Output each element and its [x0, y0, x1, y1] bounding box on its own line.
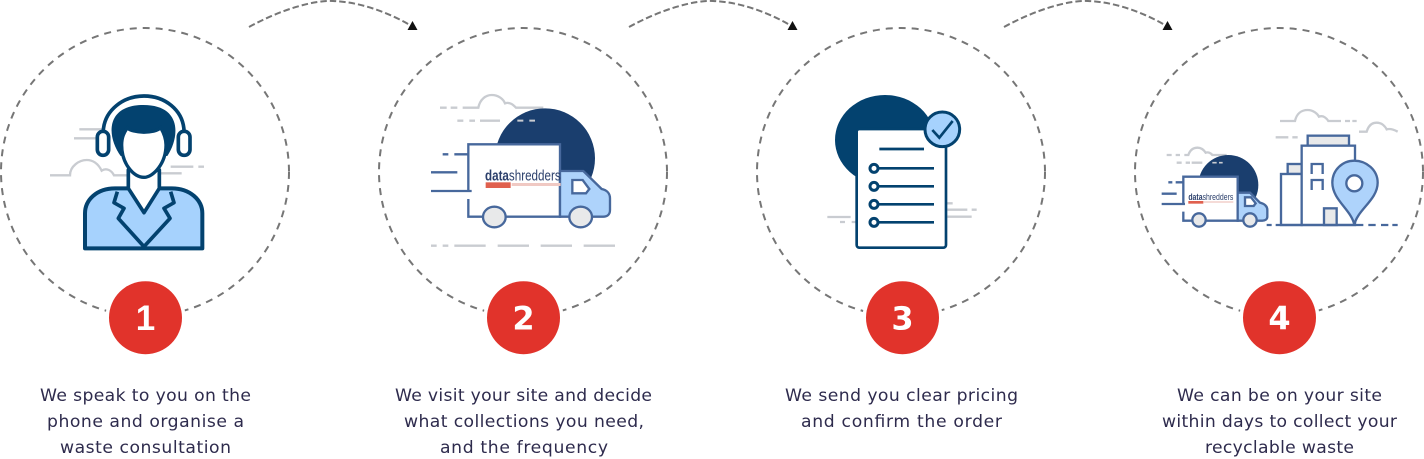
number badge 3: 3	[891, 300, 914, 338]
number badge 3	[862, 278, 942, 358]
icon: delivery truck	[431, 95, 615, 246]
caption 2	[395, 386, 652, 458]
logo: datashredders: datashredders	[485, 168, 561, 184]
caption 2: and the frequency	[440, 438, 608, 458]
panel: step 1	[1, 28, 289, 458]
caption 4: recyclable waste	[1205, 438, 1354, 458]
number badge 1	[106, 278, 186, 358]
caption 2: We visit your site and decide	[395, 386, 652, 406]
caption 4	[1162, 386, 1398, 458]
dashed ring 1	[1, 28, 289, 316]
number badge 2	[484, 278, 564, 358]
arrow: step 3 to step 4	[1004, 1, 1172, 30]
caption 4: within days to collect your	[1162, 412, 1398, 432]
caption 2: what collections you need,	[404, 412, 644, 432]
number badge 4	[1240, 278, 1320, 358]
caption 4: We can be on your site	[1177, 386, 1382, 406]
icon: agent with headset	[50, 96, 204, 248]
dashed ring 4	[1135, 28, 1423, 316]
caption 1: phone and organise a	[47, 412, 244, 432]
arrow: step 1 to step 2	[249, 1, 418, 30]
caption 3: We send you clear pricing	[785, 386, 1018, 406]
icon: check badge	[925, 112, 960, 147]
caption 1: We speak to you on the	[40, 386, 251, 406]
number badge 2: 2	[512, 300, 535, 338]
icon: map pin	[1332, 161, 1378, 225]
dashed ring 3	[757, 28, 1045, 316]
caption 3	[785, 386, 1018, 432]
panel: step 4	[1135, 28, 1423, 458]
icon: checklist document	[827, 95, 977, 248]
number badge 1: 1	[136, 299, 155, 338]
icon: truck and city location	[1162, 110, 1398, 227]
caption 1: waste consultation	[60, 438, 231, 458]
arrow: step 2 to step 3	[629, 1, 798, 30]
panel: step 3	[757, 28, 1045, 432]
caption 3: and confirm the order	[801, 412, 1003, 432]
caption 1	[40, 386, 251, 458]
dashed ring 2	[379, 28, 667, 316]
number badge 4: 4	[1268, 300, 1291, 338]
logo: datashredders small: datashredders	[1188, 192, 1234, 202]
panel: step 2	[379, 28, 667, 458]
buildings	[1281, 136, 1355, 225]
